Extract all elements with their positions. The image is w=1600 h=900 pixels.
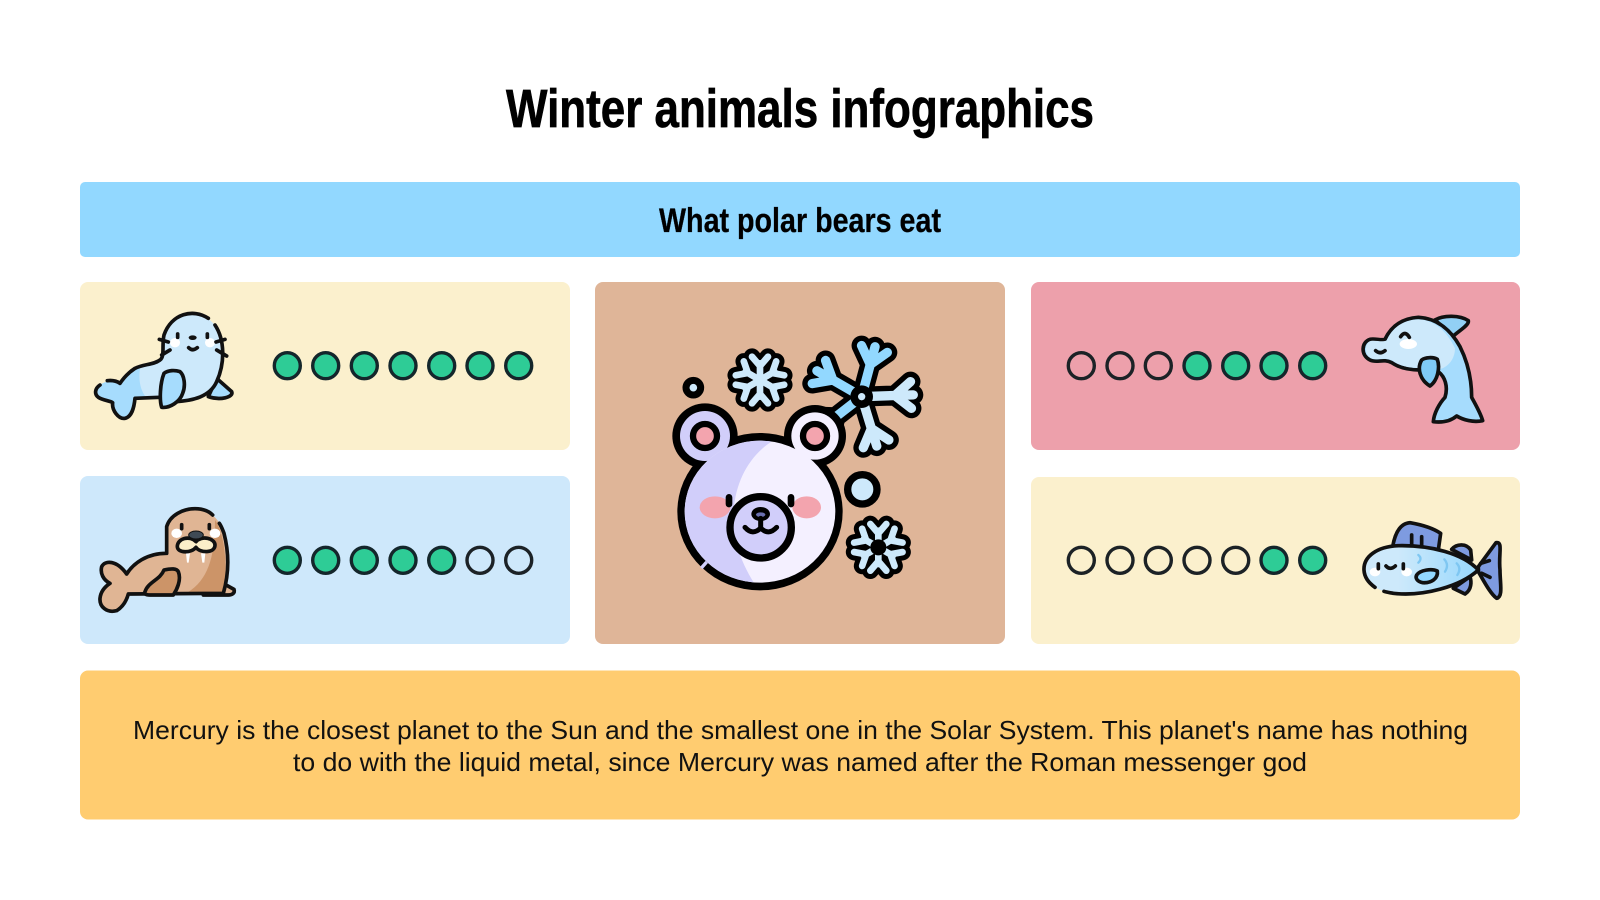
icon: fish [1364, 523, 1501, 598]
panel: fish [1031, 477, 1520, 644]
description text: Mercury is the closest planet to the Sun and the smallest one in the Solar System. This planet's name has nothing [133, 715, 1468, 745]
icon: dolphin [1363, 316, 1483, 422]
description text: to do with the liquid metal, since Mercury was named after the Roman messenger god [293, 747, 1307, 777]
banner heading: What polar bears eat [659, 202, 941, 240]
icon: walrus [100, 509, 234, 611]
rating dots: 7 of 7 [274, 353, 532, 379]
icon: seal [93, 313, 232, 423]
snow dots [686, 380, 877, 504]
banner: what polar bears eat [80, 182, 1520, 257]
icon: polar bear and snowflakes [667, 343, 914, 590]
bear head [667, 403, 846, 590]
title: Winter animals infographics [506, 79, 1094, 139]
panel: polar bear [595, 282, 1005, 644]
panel: dolphin [1031, 282, 1520, 450]
rating dots: 5 of 7 [274, 547, 532, 573]
description text [133, 715, 1468, 777]
rating dots: 2 of 7 [1068, 547, 1326, 573]
panel: description [80, 670, 1520, 820]
panel: walrus [80, 476, 570, 644]
rating dots: 4 of 7 [1068, 353, 1326, 379]
large snowflake [810, 343, 914, 450]
small snowflake top [736, 357, 784, 403]
panel: seal [80, 282, 570, 450]
small snowflake bottom [854, 524, 903, 571]
